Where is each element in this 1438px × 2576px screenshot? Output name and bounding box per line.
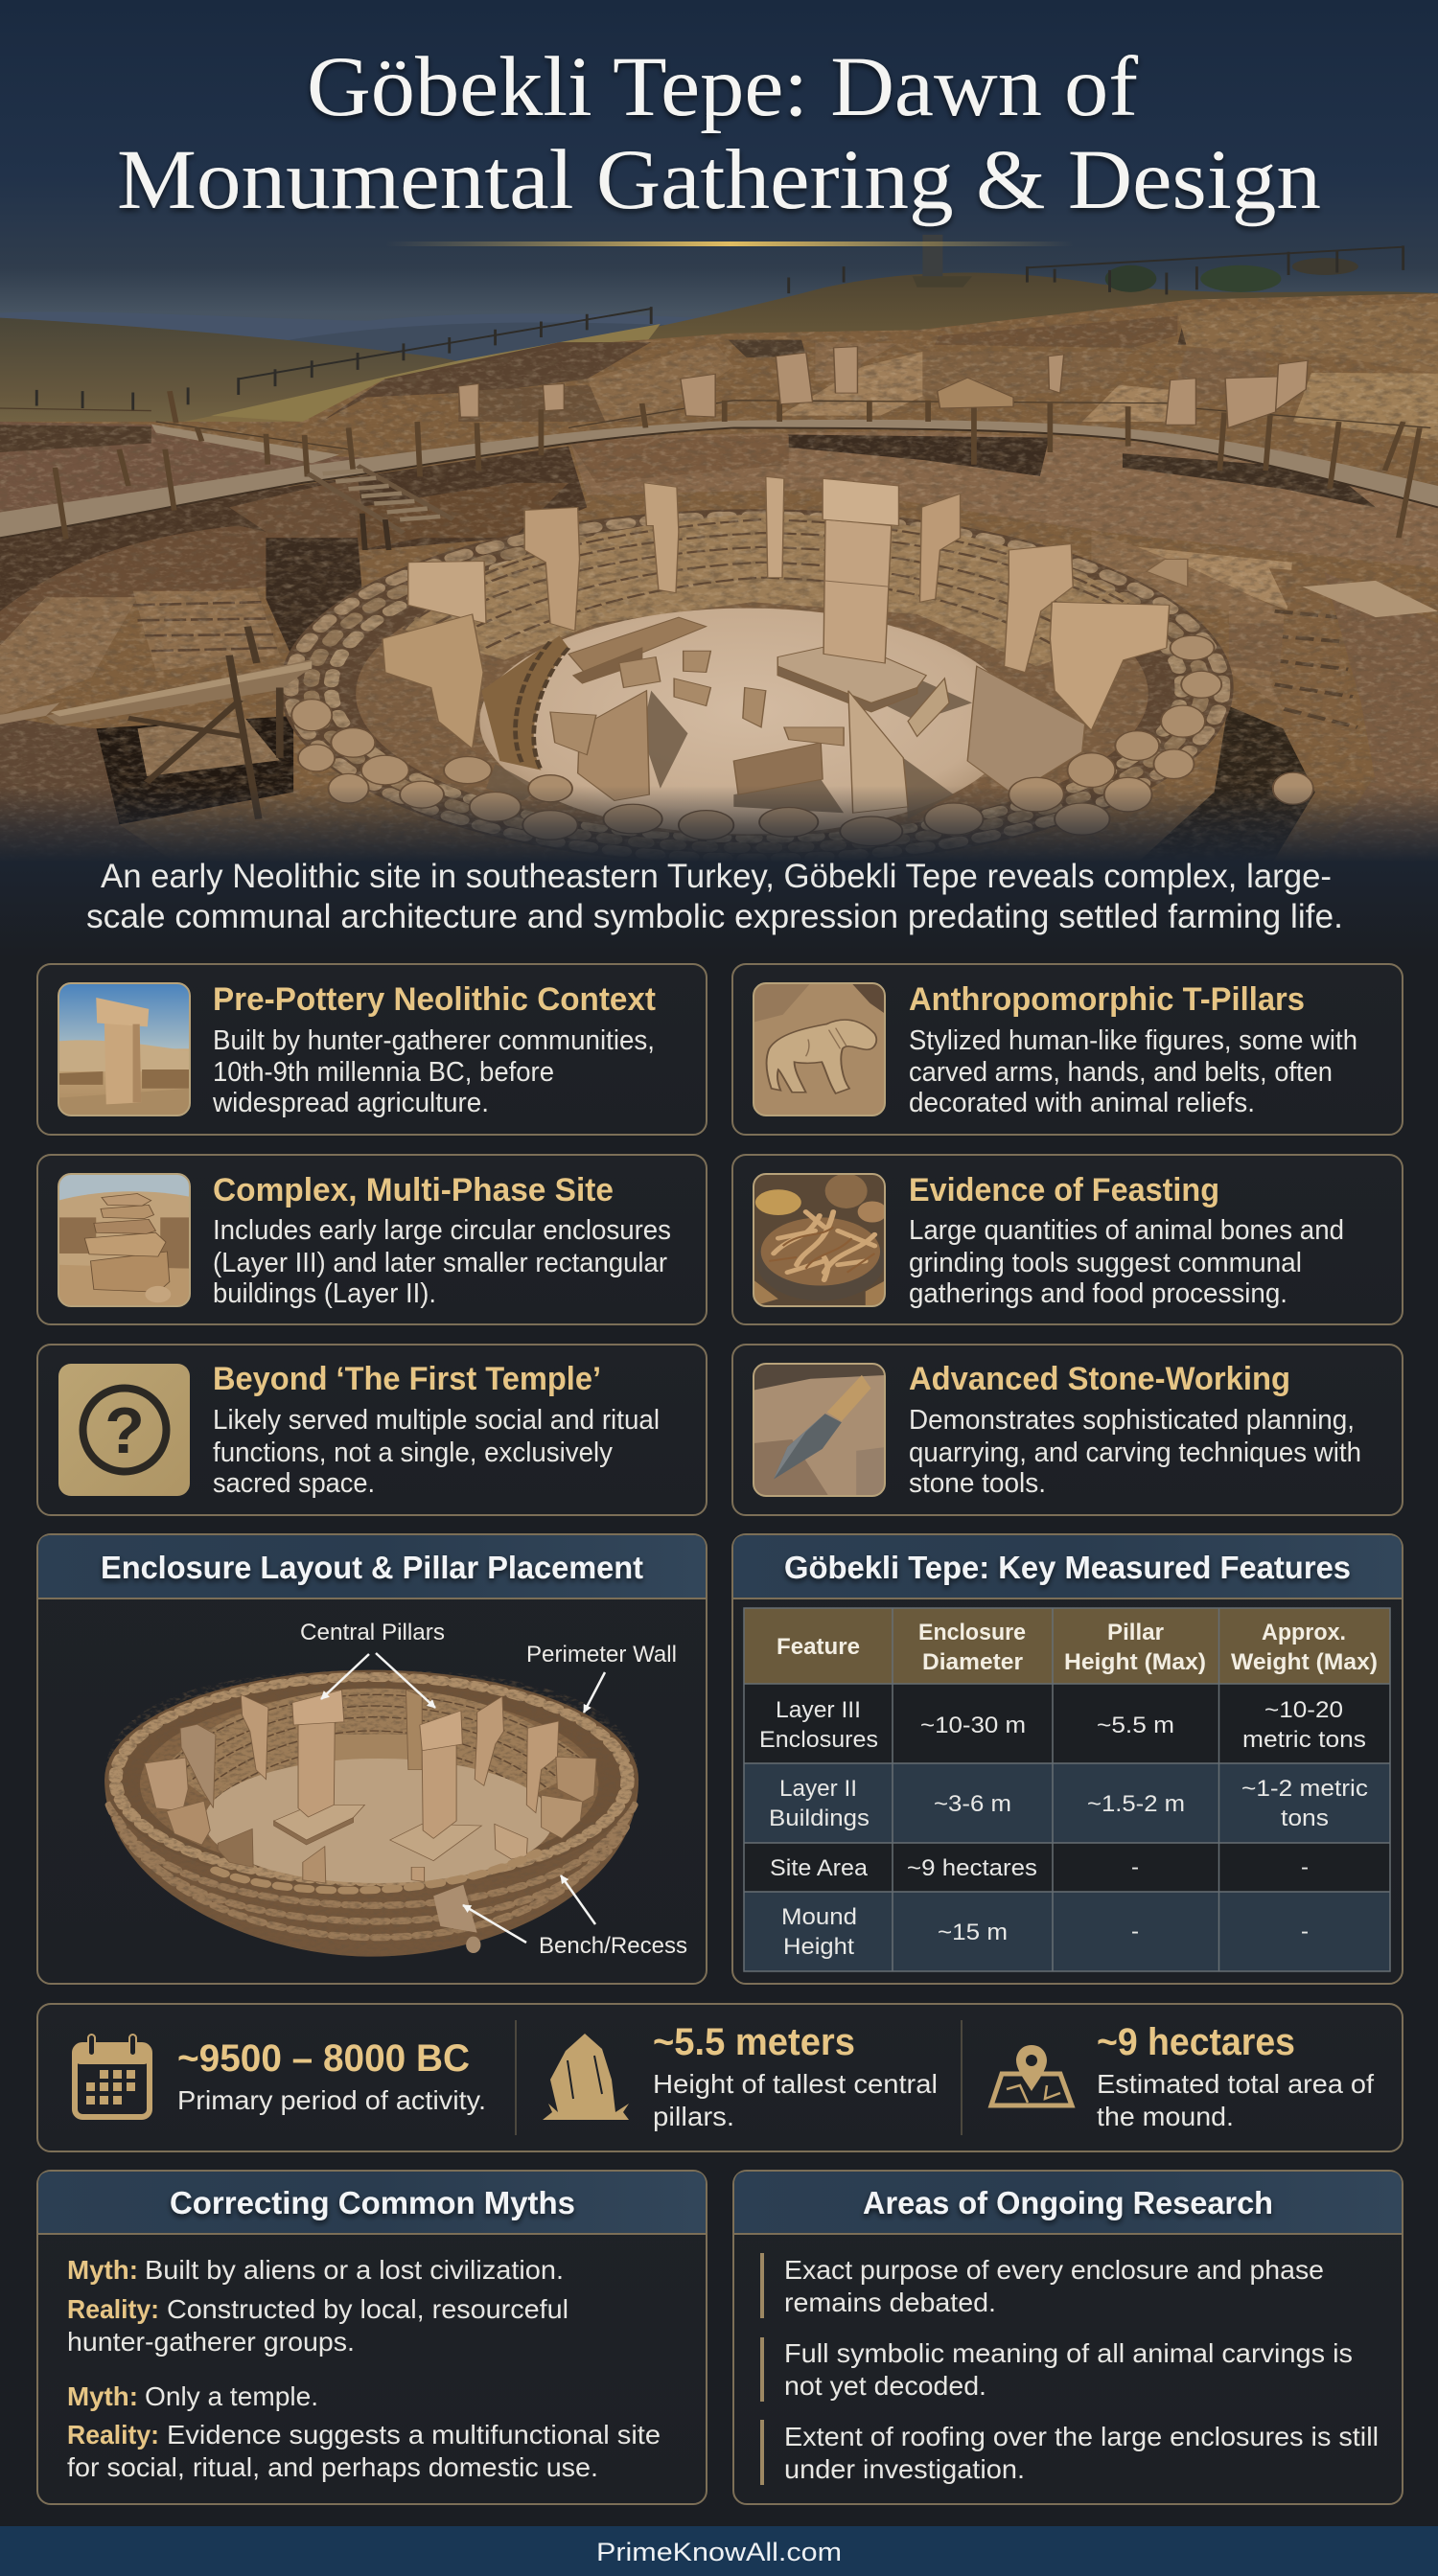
research item 2 <box>760 2337 1353 2402</box>
icon: question mark <box>58 1364 190 1496</box>
row: Site Area: ~9 hectares <box>907 1855 1037 1881</box>
research item 1: Exact purpose of every enclosure and phase <box>784 2255 1324 2285</box>
card body: 10th-9th millennia BC, before <box>213 1057 554 1088</box>
research item 3 <box>760 2420 1379 2485</box>
table header row: Weight (Max) <box>1231 1649 1378 1675</box>
icon: question mark: ? <box>104 1394 145 1467</box>
myth 2 <box>67 2381 661 2482</box>
panel header: Göbekli Tepe: Key Measured Features <box>784 1550 1351 1585</box>
row: Mound Height: ~15 m <box>938 1920 1008 1945</box>
card body: gatherings and food processing. <box>909 1278 1287 1309</box>
card body <box>212 1025 655 1118</box>
image: feast bowl <box>754 1174 887 1306</box>
card: Evidence of Feasting <box>732 1155 1403 1324</box>
card: Complex, Multi-Phase Site <box>37 1155 707 1324</box>
table header row: Height (Max) <box>1064 1649 1206 1675</box>
rock texture <box>0 293 1438 868</box>
card heading: Beyond ‘The First Temple’ <box>213 1361 601 1397</box>
stat: site area <box>1097 2021 1374 2131</box>
icon: calendar <box>75 2035 150 2117</box>
hero: excavation site photo illustration <box>0 0 1438 868</box>
myth 1 <box>67 2255 568 2357</box>
title: Monumental Gathering & Design <box>117 133 1321 227</box>
myth 1: Constructed by local, resourceful <box>167 2294 568 2324</box>
card: Anthropomorphic T-Pillars <box>732 964 1403 1135</box>
card body: buildings (Layer II). <box>213 1278 436 1309</box>
image: stacked stones <box>58 1174 190 1306</box>
stat: period of activity: ~9500 – 8000 BC <box>177 2037 470 2080</box>
row: Site Area: - <box>1131 1854 1139 1880</box>
stat: site area: ~9 hectares <box>1097 2021 1295 2063</box>
enclosure illustration <box>104 1670 638 1957</box>
card body: Large quantities of animal bones and <box>909 1215 1344 1246</box>
row: Layer II Buildings <box>769 1776 1368 1831</box>
footer: PrimeKnowAll.com <box>596 2538 842 2566</box>
lower excavation trenches <box>0 431 1438 868</box>
row: Layer II Buildings: tons <box>1281 1806 1329 1831</box>
card body: decorated with animal reliefs. <box>909 1088 1255 1118</box>
panel header: Areas of Ongoing Research <box>863 2185 1273 2220</box>
card: Pre-Pottery Neolithic Context <box>37 964 707 1135</box>
myth 2: Only a temple. <box>145 2381 318 2411</box>
card body: Built by hunter-gatherer communities, <box>213 1025 655 1056</box>
card heading: Complex, Multi-Phase Site <box>213 1172 614 1208</box>
stat: period of activity: Primary period of activity. <box>177 2085 486 2115</box>
card heading: Pre-Pottery Neolithic Context <box>213 981 656 1018</box>
row: Layer III Enclosures: Layer III <box>776 1697 861 1723</box>
row: Mound Height: Mound <box>781 1904 857 1930</box>
table header row: Diameter <box>922 1649 1023 1675</box>
research item 3: under investigation. <box>784 2454 1025 2484</box>
stat: site area: the mound. <box>1097 2102 1234 2131</box>
stat: period of activity <box>177 2037 486 2115</box>
row: Layer III Enclosures: ~10-20 <box>1264 1697 1343 1723</box>
label: Bench/Recess: Bench/Recess <box>539 1933 687 1959</box>
panel header <box>733 2172 1403 2235</box>
row: Mound Height: - <box>1301 1919 1309 1944</box>
table header row: Feature <box>777 1634 860 1660</box>
title underline <box>385 242 1074 246</box>
walkway <box>0 391 1438 540</box>
card heading: Advanced Stone-Working <box>909 1361 1290 1397</box>
image: animal relief <box>754 983 887 1116</box>
intro text: An early Neolithic site in southeastern Turkey, Göbekli Tepe reveals complex, large- <box>101 858 1332 895</box>
stairs <box>308 466 453 550</box>
card heading: Anthropomorphic T-Pillars <box>909 981 1305 1018</box>
card body <box>213 1405 660 1499</box>
data table <box>744 1608 1390 1971</box>
row: Layer III Enclosures: ~10-30 m <box>920 1713 1026 1738</box>
table header row <box>777 1620 1378 1675</box>
row: Layer II Buildings: Layer II <box>779 1776 857 1802</box>
row: Site Area: - <box>1301 1854 1309 1880</box>
card body: sacred space. <box>213 1468 375 1499</box>
stat: site area: Estimated total area of <box>1097 2069 1374 2099</box>
table header row: Approx. <box>1262 1620 1346 1645</box>
front rubble stones <box>291 635 1313 846</box>
pillars <box>383 476 1188 813</box>
myth 1: Built by aliens or a lost civilization. <box>145 2255 564 2285</box>
row: Mound Height: - <box>1131 1919 1139 1944</box>
title <box>117 40 1321 227</box>
row: Layer II Buildings: ~1.5-2 m <box>1087 1791 1185 1817</box>
panel: enclosure layout <box>37 1534 707 1984</box>
panel header: Enclosure Layout & Pillar Placement <box>101 1550 643 1585</box>
myth 2: Myth: <box>67 2381 138 2411</box>
research item 3: Extent of roofing over the large enclosures is still <box>784 2422 1379 2451</box>
pillar shadows <box>486 678 972 819</box>
card: Beyond 'The First Temple' <box>37 1345 707 1515</box>
myth 2: for social, ritual, and perhaps domestic use. <box>67 2452 598 2482</box>
panel header: Correcting Common Myths <box>170 2185 575 2220</box>
myth 1: Reality: <box>67 2294 159 2324</box>
stat: pillar height: pillars. <box>653 2102 734 2131</box>
card body: Stylized human-like figures, some with <box>909 1025 1357 1056</box>
myth 2: Evidence suggests a multifunctional site <box>167 2420 661 2450</box>
stat: pillar height <box>653 2021 938 2131</box>
row: Layer II Buildings: Buildings <box>769 1806 870 1831</box>
research item 2: Full symbolic meaning of all animal carvings is <box>784 2338 1353 2368</box>
research item 2: not yet decoded. <box>784 2371 986 2401</box>
panel: correcting common myths <box>37 2171 707 2504</box>
card body: Demonstrates sophisticated planning, <box>909 1405 1355 1436</box>
panel: key measured features table <box>732 1534 1403 1984</box>
icon: map pin <box>991 2045 1072 2105</box>
card body <box>909 1215 1344 1309</box>
card body: carved arms, hands, and belts, often <box>909 1057 1333 1088</box>
card body: grinding tools suggest communal <box>909 1248 1302 1278</box>
card body <box>909 1405 1361 1499</box>
row: Site Area: Site Area <box>770 1855 869 1881</box>
research item 1 <box>760 2253 1324 2318</box>
stat: pillar height: Height of tallest central <box>653 2069 938 2099</box>
central enclosure ring <box>280 509 1234 866</box>
card body: stone tools. <box>909 1468 1046 1499</box>
card body <box>909 1025 1357 1118</box>
card: Advanced Stone-Working <box>732 1345 1403 1515</box>
arrows <box>321 1653 605 1943</box>
intro text <box>86 858 1343 935</box>
hill landmarks <box>913 235 1358 292</box>
row: Layer II Buildings: ~3-6 m <box>934 1791 1011 1817</box>
panel: areas of ongoing research <box>733 2171 1403 2504</box>
row: Layer II Buildings: ~1-2 metric <box>1241 1776 1368 1802</box>
title: Göbekli Tepe: Dawn of <box>307 40 1138 134</box>
row: Layer III Enclosures: metric tons <box>1242 1727 1366 1753</box>
image: T-pillar in desert <box>58 983 190 1116</box>
intro text: scale communal architecture and symbolic expression predating settled farming life. <box>86 898 1343 935</box>
ramp <box>0 627 312 819</box>
image: stone knife <box>754 1364 887 1496</box>
card body: Likely served multiple social and ritual <box>213 1405 660 1436</box>
myth 1: hunter-gatherer groups. <box>67 2327 355 2357</box>
card body: widespread agriculture. <box>212 1088 489 1118</box>
card heading: Evidence of Feasting <box>909 1172 1219 1208</box>
row: Layer III Enclosures <box>759 1697 1366 1753</box>
panel header <box>37 2172 707 2235</box>
panel: key statistics bar <box>37 2004 1403 2151</box>
row: Layer III Enclosures: Enclosures <box>759 1727 878 1753</box>
card body <box>213 1215 671 1309</box>
panel header <box>37 1535 707 1599</box>
label: Perimeter Wall: Perimeter Wall <box>526 1642 677 1668</box>
research item 1: remains debated. <box>784 2288 996 2317</box>
row: Mound Height <box>781 1904 1309 1960</box>
row: Site Area <box>770 1854 1309 1881</box>
panel header <box>732 1535 1403 1599</box>
label: Central Pillars: Central Pillars <box>300 1620 445 1645</box>
myth 1: Myth: <box>67 2255 138 2285</box>
row: Layer III Enclosures: ~5.5 m <box>1097 1713 1174 1738</box>
card body: quarrying, and carving techniques with <box>909 1438 1361 1468</box>
fence posts <box>36 245 1403 411</box>
myth 2: Reality: <box>67 2420 159 2450</box>
floor <box>479 609 1015 835</box>
footer <box>0 2526 1438 2576</box>
row: Mound Height: Height <box>783 1934 854 1960</box>
icon: standing stone <box>543 2034 629 2120</box>
stat: pillar height: ~5.5 meters <box>653 2021 855 2063</box>
distant pillars <box>458 347 1308 427</box>
card body: functions, not a single, exclusively <box>213 1438 614 1468</box>
card body: Includes early large circular enclosures <box>213 1215 671 1246</box>
table header row: Enclosure <box>918 1620 1026 1645</box>
card body: (Layer III) and later smaller rectangular <box>213 1248 667 1278</box>
table header row: Pillar <box>1107 1620 1164 1645</box>
